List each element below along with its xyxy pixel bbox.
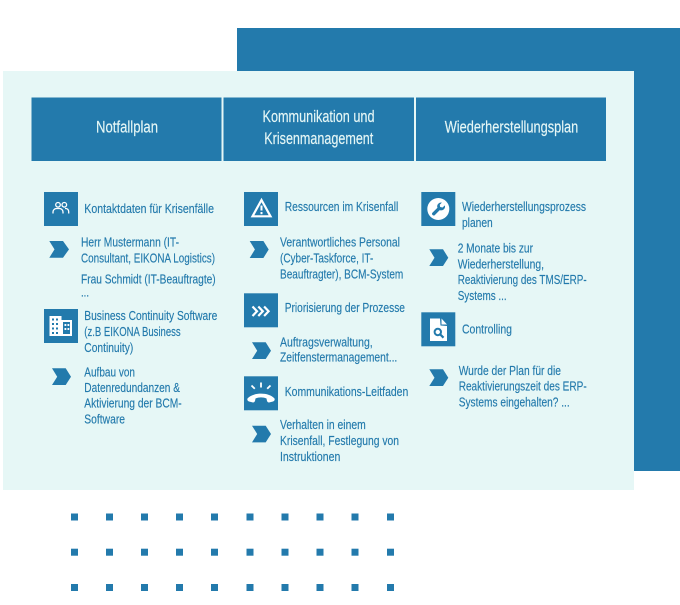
text: contact persons: ...: [81, 285, 89, 300]
text: Wiederherstellungsprozess: planen: [462, 215, 493, 230]
text: Wurde der Plan: Wurde der Plan für die: [459, 363, 561, 378]
text: Business Continuity Software: Business Continuity Software: [84, 308, 217, 323]
text: Verhalten: Instruktionen: [280, 449, 340, 464]
icon: warning triangle: [244, 192, 278, 226]
text: Business Continuity Software: [84, 308, 217, 355]
arrow: contact details: [49, 241, 69, 258]
header: Wiederherstellungsplan: Wiederherstellungsplan: [445, 119, 578, 137]
arrow: controlling: [429, 369, 448, 386]
text: Wurde der Plan: Systems eingehalten? ...: [459, 395, 570, 410]
text: Aufbau: Software: [84, 411, 125, 426]
text: Verhalten: Krisenfall, Festlegung von: [280, 433, 399, 448]
text: Verantwortliches Personal: (Cyber-Taskforce, IT-: [280, 251, 373, 266]
text: Wurde der Plan: [459, 363, 587, 410]
text: 2 Monate: 2 Monate bis zur: [458, 241, 534, 256]
text: Aufbau: [84, 365, 182, 426]
header: Kommunikation und Krisenmanagement: Kommunikation und: [262, 108, 374, 126]
text: contact persons: Frau Schmidt (IT-Beauftragte): [81, 271, 216, 286]
text: Business Continuity Software: Continuity): [84, 340, 133, 355]
arrow: software: [52, 368, 71, 385]
header: Wiederherstellungsplan: [416, 98, 606, 161]
header: Kommunikation und Krisenmanagement: [224, 98, 414, 161]
text: 2 Monate: [458, 241, 587, 303]
background blue block: [237, 28, 680, 471]
text: Auftragsverwaltung: Auftragsverwaltung,: [280, 335, 373, 350]
text: Priorisierung: Priorisierung der Prozesse: [285, 300, 405, 315]
header: Notfallplan: [32, 98, 222, 161]
text: Aufbau: Datenredundanzen &: [84, 380, 180, 395]
text: Verantwortliches Personal: Verantwortliches Personal: [280, 235, 400, 250]
header: Kommunikation und Krisenmanagement: Krisenmanagement: [264, 130, 374, 148]
arrow: resources: [250, 241, 269, 258]
dot grid: [71, 514, 394, 591]
header: Notfallplan: Notfallplan: [96, 119, 158, 137]
icon: telephone: [244, 376, 278, 410]
icon: people: [44, 192, 78, 226]
text: Kommunikations-Leitfaden: Kommunikations-Leitfaden: [285, 384, 408, 399]
text: 2 Monate: Systems ...: [458, 288, 507, 303]
text: Auftragsverwaltung: [280, 335, 397, 365]
text: Verantwortliches Personal: [280, 235, 403, 282]
text: Wurde der Plan: Reaktivierungszeit des ERP-: [459, 379, 587, 394]
text: 2 Monate: Wiederherstellung,: [458, 256, 544, 271]
icon: wrench: [421, 192, 455, 226]
text: Verhalten: [280, 417, 399, 464]
text: 2 Monate: Reaktivierung des TMS/ERP-: [458, 272, 587, 287]
arrow: recovery: [429, 249, 448, 266]
text: Wiederherstellungsprozess: Wiederherstellungsprozess: [462, 199, 586, 214]
text: Verantwortliches Personal: Beauftragter), BCM-System: [280, 267, 403, 282]
text: Wiederherstellungsprozess: [462, 199, 586, 230]
text: contact persons: Consultant, EIKONA Logistics): [81, 251, 215, 266]
text: Aufbau: Aufbau von: [84, 365, 135, 380]
text: contact persons: [81, 235, 216, 300]
main light panel: [3, 71, 634, 490]
text: Aufbau: Aktivierung der BCM-: [84, 396, 182, 411]
arrow: priorities: [252, 342, 271, 359]
icon: document with magnifier: [421, 312, 455, 346]
icon: building: [44, 309, 78, 343]
text: Controlling: Controlling: [462, 321, 512, 336]
text: Ressourcen: Ressourcen im Krisenfall: [285, 199, 398, 214]
text: Auftragsverwaltung: Zeitfenstermanagement...: [280, 350, 397, 365]
text: Kontaktdaten: Kontaktdaten für Krisenfälle: [84, 201, 214, 216]
text: Verhalten: Verhalten in einem: [280, 417, 366, 432]
icon: triple chevrons: [244, 293, 278, 327]
text: Business Continuity Software: (z.B EIKONA Business: [84, 324, 181, 339]
text: contact persons: Herr Mustermann (IT-: [81, 235, 179, 250]
arrow: communication: [252, 426, 271, 442]
